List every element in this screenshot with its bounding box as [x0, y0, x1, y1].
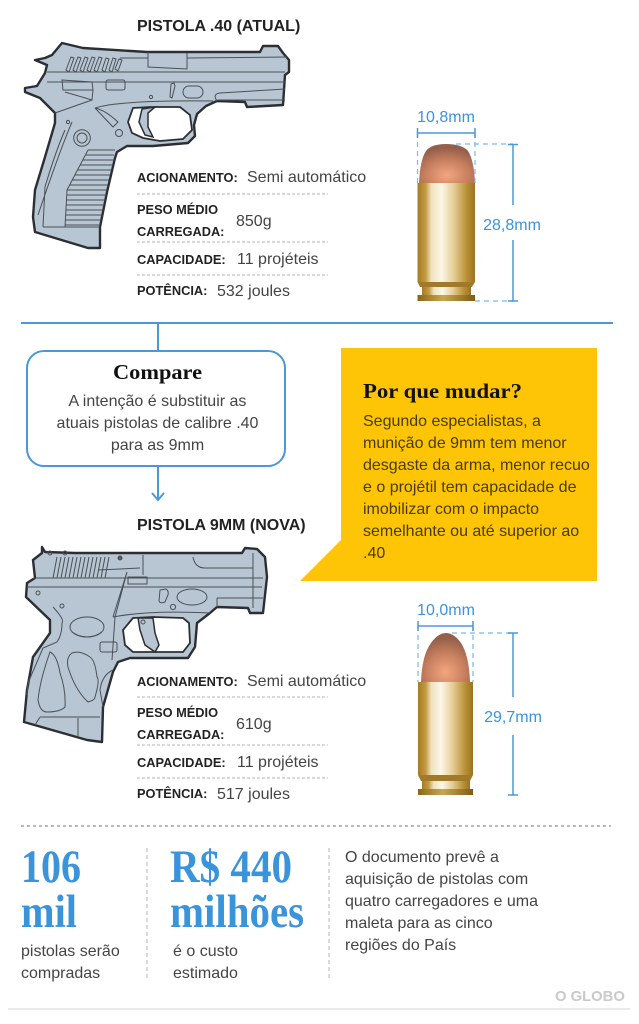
spec table: pistola 9mm [137, 673, 366, 803]
panel: por que mudar: desgaste da arma, menor recuo [363, 457, 590, 474]
text block: documento: maleta para as cinco [345, 915, 493, 932]
panel: por que mudar: .40 [363, 545, 385, 562]
panel: compare [27, 351, 285, 466]
spec table: pistola .40: 11 projéteis [237, 251, 319, 268]
spec table: pistola .40: CAPACIDADE: [137, 252, 226, 267]
spec table: pistola 9mm: 610g [236, 716, 272, 733]
spec table: pistola .40: POTÊNCIA: [137, 283, 207, 298]
stat: R$ 440 milhões: estimado [173, 965, 238, 982]
panel: por que mudar: Segundo especialistas, a [363, 413, 541, 430]
spec table: pistola 9mm: 517 joules [217, 786, 290, 803]
stat: 106 mil: compradas [21, 965, 100, 982]
panel: compare: A intenção é substituir as [69, 393, 246, 410]
spec table: pistola .40: Semi automático [247, 169, 366, 186]
bullet .40 with dimensions: 10,8mm [417, 109, 475, 126]
bullet 9mm with dimensions: 10,0mm [417, 602, 475, 619]
title: pistola .40: PISTOLA .40 (ATUAL) [137, 18, 300, 35]
bullet 9mm with dimensions: 29,7mm [484, 709, 542, 726]
spec table: pistola .40 [137, 169, 366, 300]
panel: compare: atuais pistolas de calibre .40 [57, 415, 259, 432]
panel: compare: para as 9mm [111, 437, 204, 454]
logo: O Globo: O GLOBO [555, 989, 625, 1005]
bullet .40 with dimensions [417, 109, 541, 301]
spec table: pistola .40: CARREGADA: [137, 224, 224, 239]
text block: documento [345, 849, 538, 954]
illustration: pistola .40 [25, 43, 289, 248]
panel: por que mudar [300, 348, 597, 581]
divider line [21, 322, 613, 324]
stat: 106 mil: pistolas serão [21, 943, 120, 960]
panel: compare: Compare [113, 360, 202, 384]
panel: por que mudar: e o projétil tem capacidade de [363, 479, 577, 496]
text block: documento: aquisição de pistolas com [345, 871, 528, 888]
panel: por que mudar: imobilizar com o impacto [363, 501, 539, 518]
stat: R$ 440 milhões: é o custo [173, 943, 238, 960]
stat: 106 mil [21, 841, 120, 982]
bullet 9mm with dimensions [417, 602, 542, 795]
panel: por que mudar: Por que mudar? [363, 379, 522, 403]
text block: documento: quatro carregadores e uma [345, 893, 538, 910]
spec table: pistola .40: ACIONAMENTO: [137, 170, 238, 185]
panel: por que mudar: munição de 9mm tem menor [363, 435, 567, 452]
spec table: pistola .40: 532 joules [217, 283, 290, 300]
spec table: pistola 9mm: Semi automático [247, 673, 366, 690]
spec table: pistola .40: 850g [236, 213, 272, 230]
spec table: pistola 9mm: 11 projéteis [237, 754, 319, 771]
stat: R$ 440 milhões: milhões [170, 886, 304, 938]
divider dashed [21, 825, 611, 827]
text block: documento: O documento prevê a [345, 849, 499, 866]
text block: documento: regiões do País [345, 937, 456, 954]
stat: 106 mil: mil [21, 886, 77, 938]
stat: 106 mil: 106 [21, 841, 81, 893]
spec table: pistola 9mm: CAPACIDADE: [137, 755, 226, 770]
illustration: pistola 9mm [24, 547, 267, 742]
spec table: pistola 9mm: ACIONAMENTO: [137, 674, 238, 689]
stat: R$ 440 milhões: R$ 440 [170, 841, 292, 893]
panel: por que mudar: semelhante ou até superior ao [363, 523, 579, 540]
bullet .40 with dimensions: 28,8mm [483, 217, 541, 234]
stat: R$ 440 milhões [170, 841, 304, 982]
spec table: pistola 9mm: PESO MÉDIO [137, 705, 218, 720]
arrow down [152, 466, 164, 500]
connector line [157, 323, 159, 351]
spec table: pistola 9mm: POTÊNCIA: [137, 786, 207, 801]
title: pistola 9mm: PISTOLA 9MM (NOVA) [137, 517, 306, 534]
spec table: pistola .40: PESO MÉDIO [137, 202, 218, 217]
spec table: pistola 9mm: CARREGADA: [137, 727, 224, 742]
